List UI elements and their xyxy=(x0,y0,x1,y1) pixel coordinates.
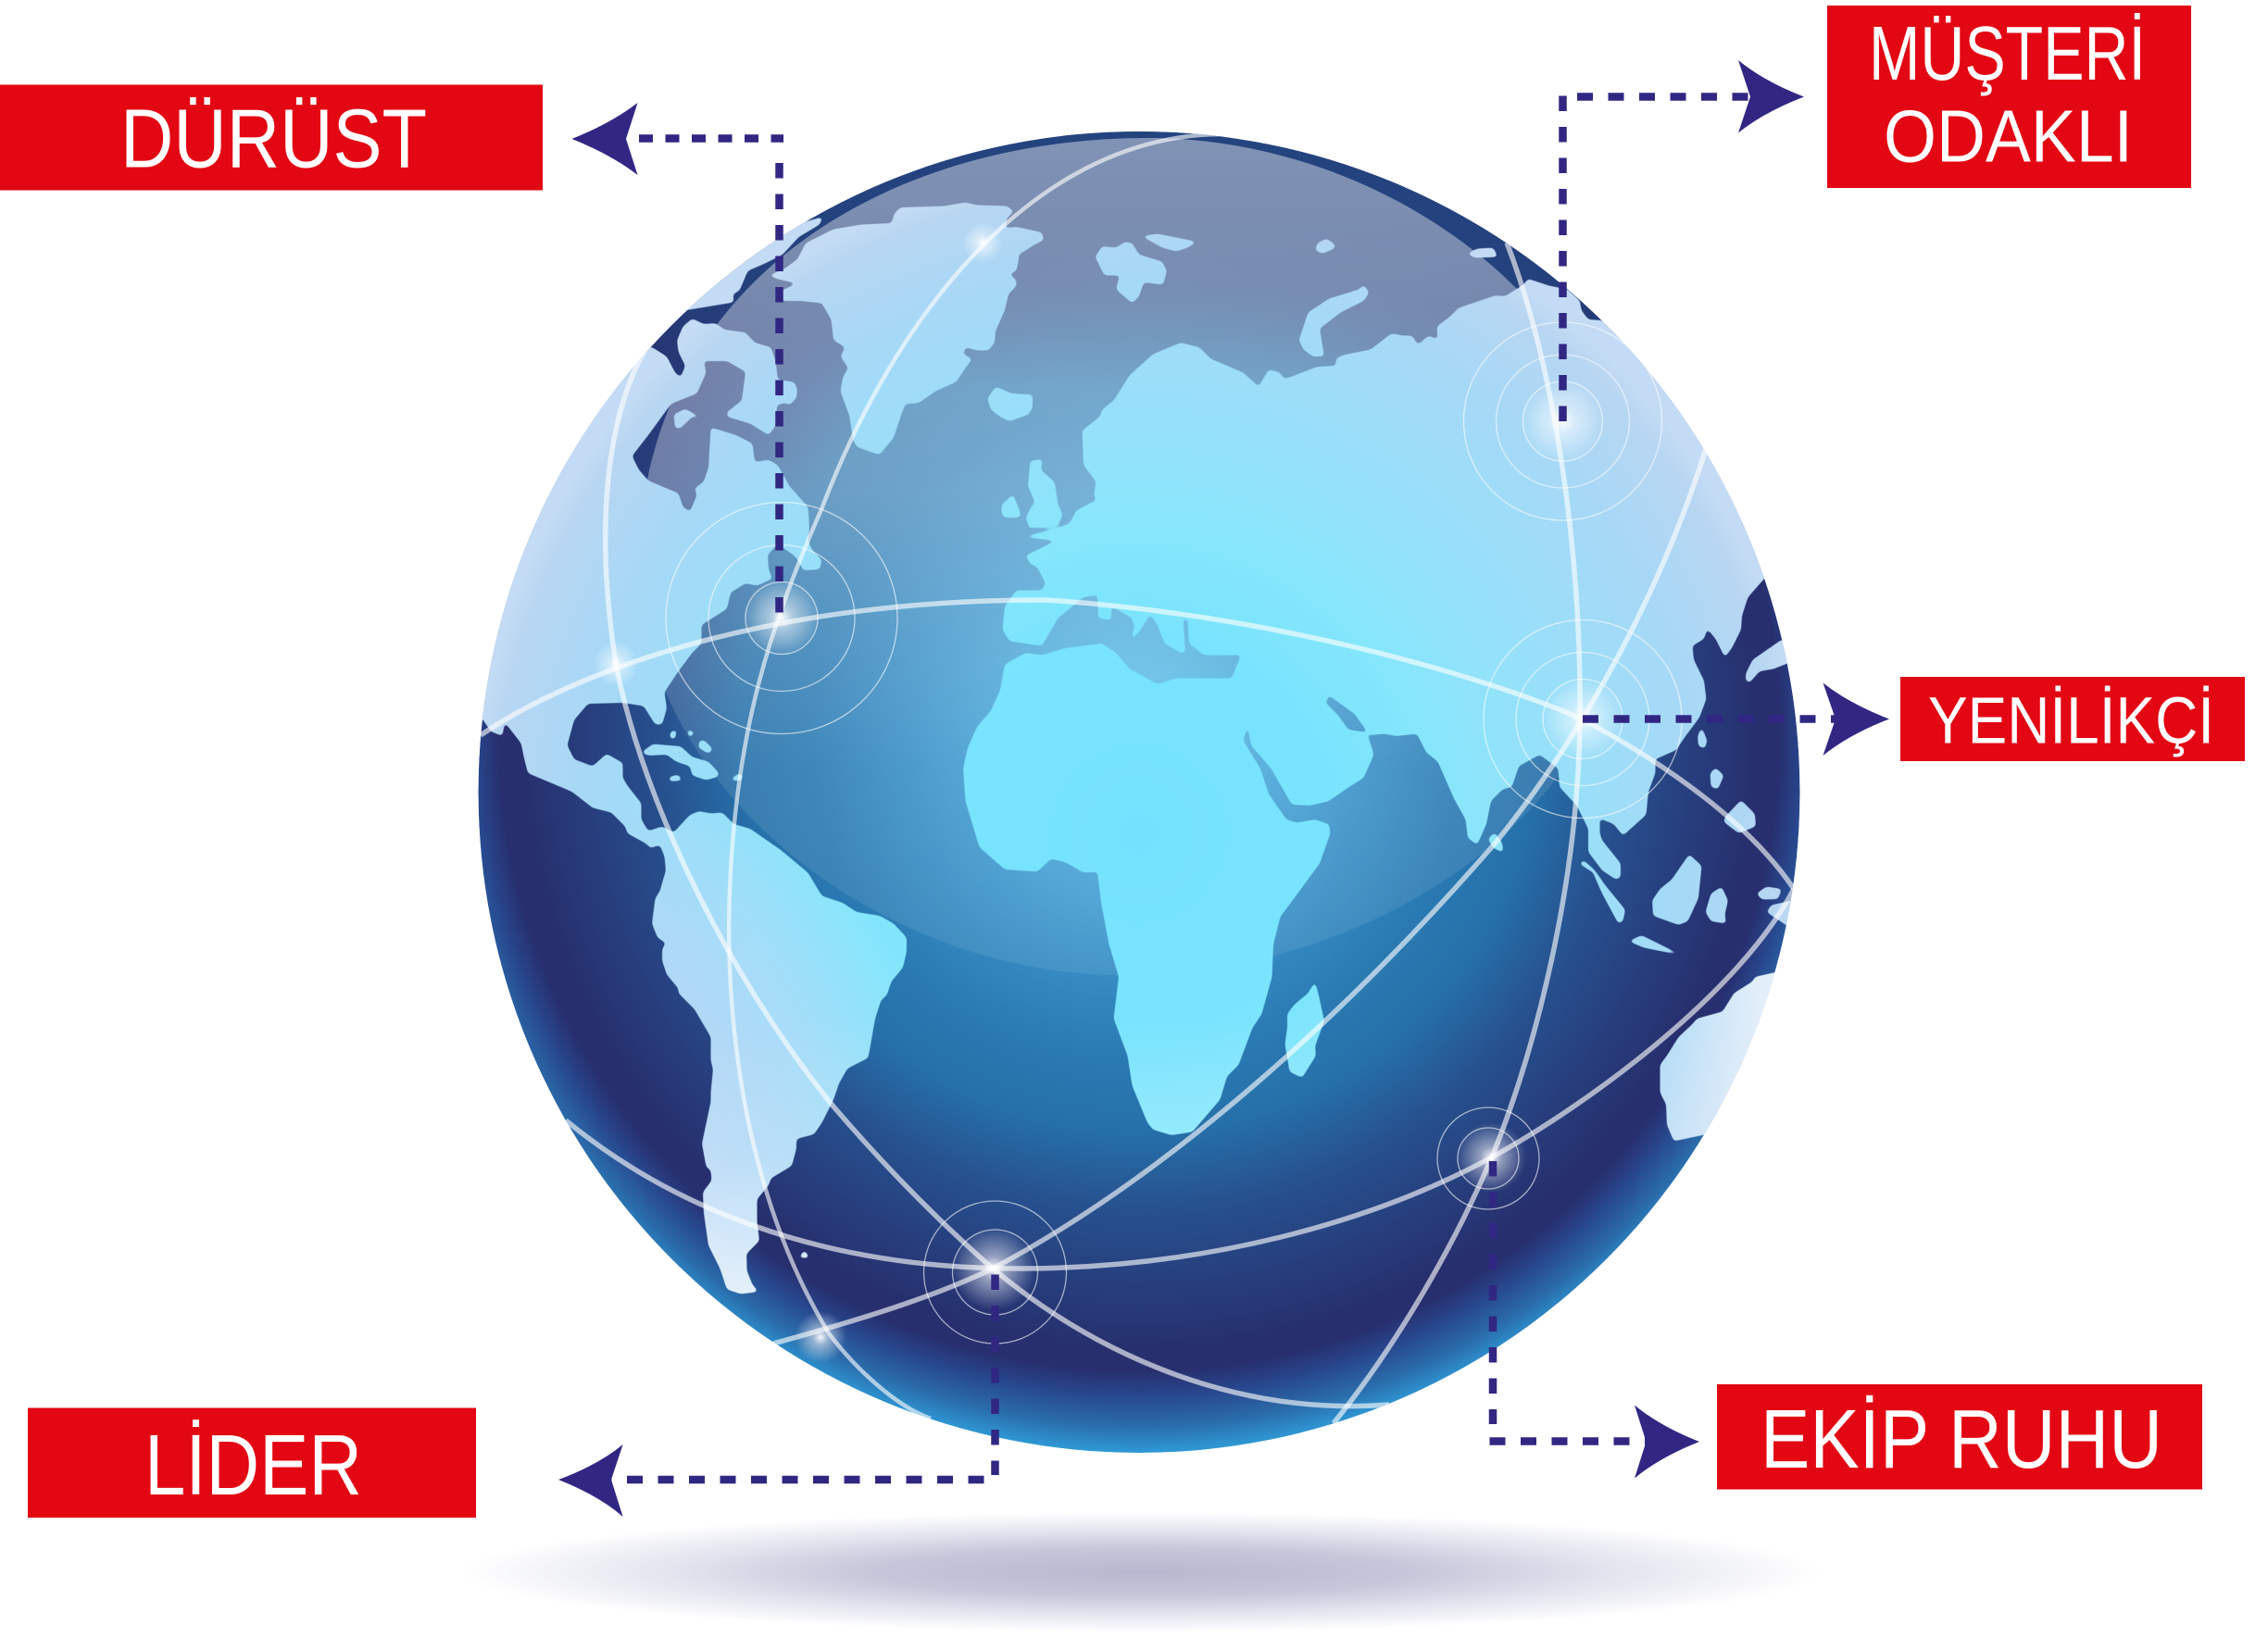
label: MÜŞTERİ ODAKLI xyxy=(1827,6,2191,188)
arrow: DÜRÜST xyxy=(572,103,637,175)
globe xyxy=(445,102,1834,1482)
globe ocean sphere xyxy=(478,131,1800,1453)
top rim tint xyxy=(643,131,1641,363)
label: LİDER: LİDER xyxy=(144,1417,362,1513)
arrow: LİDER xyxy=(558,1444,623,1517)
label: YENİLİKÇİ: YENİLİKÇİ xyxy=(1928,685,2214,757)
connector: EKİP RUHU xyxy=(1489,1161,1653,1441)
node glows xyxy=(594,222,1624,1363)
label: DÜRÜST: DÜRÜST xyxy=(120,93,427,185)
connector: LİDER xyxy=(607,1274,995,1480)
connector: DÜRÜST xyxy=(639,139,783,618)
arrow: MÜŞTERİ ODAKLI xyxy=(1738,60,1804,133)
node rings xyxy=(666,322,1682,1344)
connector: YENİLİKÇİ xyxy=(1583,715,1843,723)
label: MÜŞTERİ ODAKLI: MÜŞTERİ xyxy=(1869,10,2146,96)
arrow: YENİLİKÇİ xyxy=(1823,683,1889,756)
ground shadow xyxy=(461,1512,1823,1632)
label: DÜRÜST xyxy=(0,85,543,191)
arrow: EKİP RUHU xyxy=(1635,1406,1699,1478)
label: MÜŞTERİ ODAKLI: ODAKLI xyxy=(1884,94,2133,178)
connector: MÜŞTERİ ODAKLI xyxy=(1563,93,1752,421)
network arcs xyxy=(481,134,1794,1423)
label: LİDER xyxy=(28,1407,476,1518)
label: EKİP RUHU: EKİP RUHU xyxy=(1761,1394,2162,1486)
glass highlight xyxy=(639,138,1635,975)
continents xyxy=(482,202,1791,1294)
